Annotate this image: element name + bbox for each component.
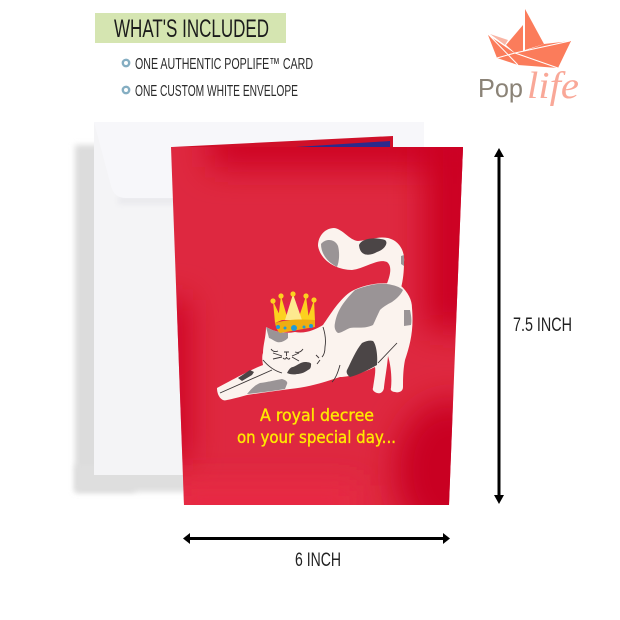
tail patch dark — [359, 238, 386, 255]
side patch — [404, 310, 411, 326]
wordmark pop: Pop — [478, 73, 523, 103]
cat line details — [220, 327, 397, 393]
wordmark life: life — [527, 65, 579, 107]
crown — [270, 291, 317, 333]
crown red cap — [278, 301, 309, 322]
envelope — [75, 122, 424, 492]
item two: ONE CUSTOM WHITE ENVELOPE — [135, 83, 298, 100]
message line two: on your special day... — [237, 428, 396, 448]
crown tips — [270, 298, 276, 304]
boat hull — [488, 35, 571, 68]
envelope flap — [94, 122, 424, 198]
card shading — [176, 147, 463, 505]
small sail — [506, 25, 523, 54]
bullet two — [123, 87, 129, 93]
card front — [171, 147, 463, 505]
cat body — [217, 283, 413, 400]
card message — [237, 406, 396, 448]
message line one: A royal decree — [260, 406, 374, 426]
blue inner page — [280, 141, 390, 148]
envelope shadow — [75, 145, 135, 492]
tail patch side — [401, 255, 404, 266]
heading band — [95, 13, 286, 43]
head patch — [266, 327, 288, 342]
greeting card — [171, 136, 463, 505]
arm patch dark — [238, 370, 254, 381]
body patch light — [335, 284, 403, 333]
bullet one — [123, 60, 129, 66]
item one: ONE AUTHENTIC POPLIFE™ CARD — [135, 56, 313, 73]
tail — [318, 228, 404, 288]
crown band — [275, 319, 315, 333]
header: what's included — [95, 13, 313, 100]
main sail — [525, 9, 544, 50]
tail patch light — [321, 240, 339, 267]
height dimension arrow — [494, 148, 504, 504]
pale sail — [490, 34, 508, 45]
body patch dark — [347, 341, 377, 377]
card back panel — [172, 136, 393, 150]
belly patch — [247, 379, 287, 394]
face patch — [287, 362, 311, 374]
cat illustration — [217, 228, 413, 400]
crown jewels — [276, 325, 280, 329]
envelope body — [94, 122, 424, 475]
width dimension arrow — [183, 533, 450, 544]
crown points — [273, 296, 315, 323]
height label: 7.5 INCH — [513, 315, 572, 336]
heading text: WHAT'S INCLUDED — [114, 15, 269, 43]
width label: 6 INCH — [295, 550, 341, 571]
logo: poplife origami boat — [478, 9, 579, 107]
